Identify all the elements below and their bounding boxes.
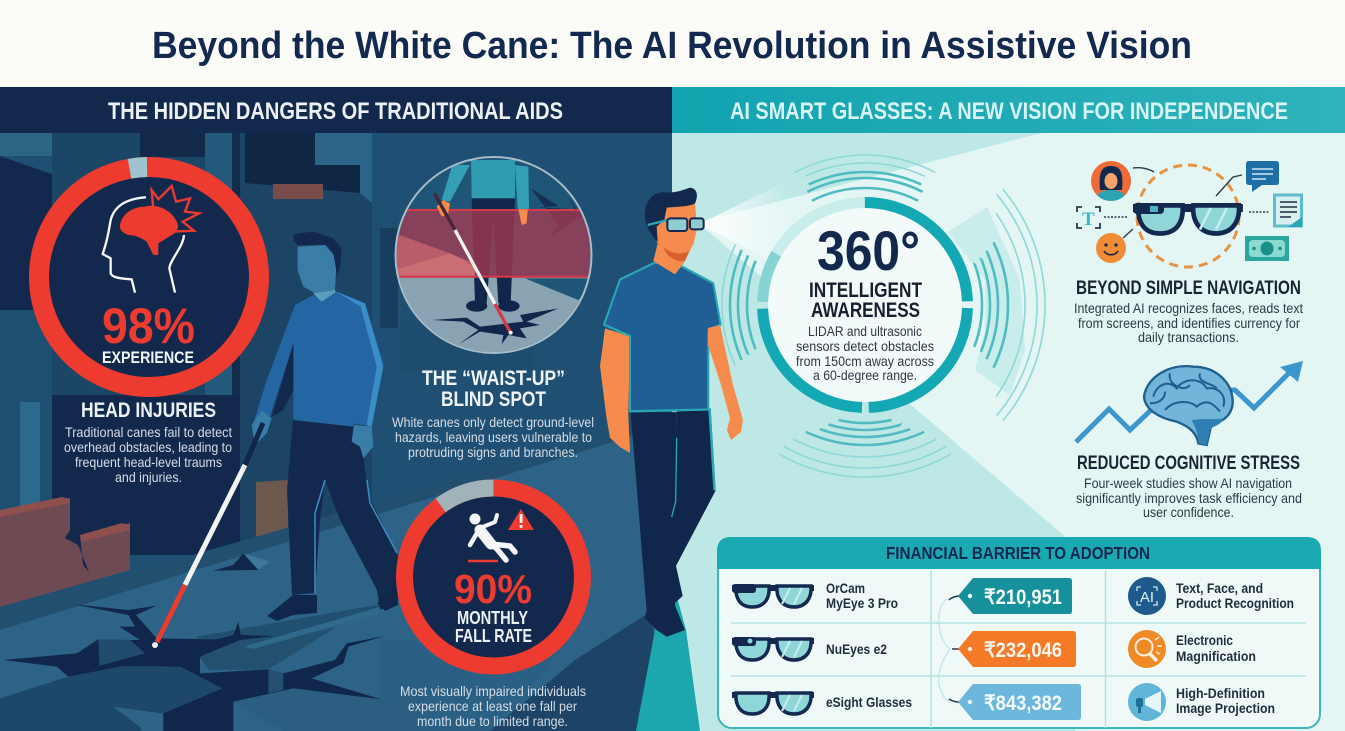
navigation text: from screens, and identifies currency for [1078, 315, 1300, 331]
fall rate text: experience at least one fall per [408, 698, 577, 714]
sonar arcs around the 360 ring [611, 51, 1119, 559]
heading: waist-up blind spot: THE “WAIST-UP” [422, 367, 565, 390]
cognitive stress text: Four-week studies show AI navigation [1084, 475, 1292, 491]
icon: document [1274, 195, 1302, 227]
icon: chat bubble [1246, 161, 1279, 192]
row: OrCam: OrCam [826, 581, 865, 596]
body [600, 262, 721, 637]
left panel background: dark street scene [0, 132, 672, 731]
feature: magnification: Electronic [1176, 633, 1233, 648]
head injuries text: frequent head-level traums [75, 454, 222, 470]
progress ring [759, 199, 971, 411]
right arm [708, 325, 743, 440]
feature: magnification [1128, 630, 1256, 668]
walking man with white cane [152, 232, 398, 648]
row: eSight: eSight Glasses [826, 695, 912, 710]
icon: text scan: T [1082, 209, 1095, 230]
table frame [718, 538, 1320, 728]
stat: 90% monthly fall rate [369, 453, 618, 701]
cognitive stress text [1076, 475, 1302, 520]
head injuries text: Traditional canes fail to detect [65, 424, 232, 440]
background branches [531, 188, 582, 236]
man: upper body and head [252, 232, 383, 458]
title: Beyond the White Cane: The AI Revolution in Assistive Vision [152, 25, 1192, 67]
row: OrCam [732, 581, 898, 611]
cognitive stress text: user confidence. [1143, 504, 1234, 520]
experience label: EXPERIENCE [102, 348, 194, 367]
feature: image projection: Image Projection [1176, 701, 1275, 716]
row: NuEyes: NuEyes e2 [826, 642, 887, 657]
brain [1144, 366, 1233, 445]
right panel background: light teal with scan beam [636, 132, 1345, 731]
left header: THE HIDDEN DANGERS OF TRADITIONAL AIDS [108, 98, 563, 125]
row: NuEyes [732, 637, 887, 660]
icon: banknote [1245, 236, 1289, 261]
heading: intelligent awareness: AWARENESS [811, 299, 920, 322]
awareness text: from 150cm away across [796, 353, 934, 369]
panel: 360 intelligent awareness [759, 199, 971, 411]
white cane [152, 423, 263, 648]
heading: intelligent awareness [809, 279, 922, 322]
icon: person falling [468, 514, 515, 561]
row: OrCam: MyEye 3 Pro [826, 596, 898, 611]
heading: head injuries: HEAD INJURIES [81, 399, 216, 422]
panel: financial barrier table [717, 537, 1321, 728]
left arm [600, 328, 630, 453]
feature: AI recognition: Product Recognition [1176, 596, 1294, 611]
smart glasses [1133, 204, 1243, 234]
section headers [0, 87, 1345, 133]
cracked pavement [0, 553, 420, 731]
awareness text: sensors detect obstacles [796, 338, 934, 354]
navigation text: daily transactions. [1138, 329, 1239, 345]
feature: AI recognition [1128, 577, 1294, 615]
man wearing AI smart glasses [600, 188, 743, 637]
connector lines [1104, 168, 1269, 238]
monthly fall rate label: FALL RATE [455, 626, 532, 646]
monthly fall rate label [455, 608, 532, 646]
dashed scan circle [1137, 165, 1239, 267]
icon: woman face [1091, 161, 1131, 201]
icon: brain with rising arrow [1076, 361, 1303, 445]
head injuries text [64, 424, 232, 485]
table dividers [731, 570, 1306, 728]
legs and shoes [466, 198, 520, 312]
head injuries text: and injuries. [115, 469, 182, 485]
donut chart 90% [369, 453, 618, 701]
price tag: eSight: ₹843,382 [984, 692, 1062, 715]
feature: AI recognition: Text, Face, and [1176, 581, 1263, 596]
price tag: eSight [958, 684, 1081, 720]
cognitive stress text: significantly improves task efficiency and [1076, 490, 1302, 506]
fall rate text [400, 683, 586, 729]
90% value: 90% [454, 566, 532, 612]
row: eSight [732, 692, 912, 714]
icon: head with brain injury [103, 186, 199, 293]
feature: AI recognition: AI [1140, 589, 1154, 606]
feature: magnification: Magnification [1176, 649, 1256, 664]
price tag: NuEyes: ₹232,046 [984, 639, 1062, 662]
rising arrow [1076, 361, 1303, 442]
icon: text scan [1077, 207, 1100, 230]
feature: image projection [1128, 683, 1275, 721]
98% value: 98% [102, 298, 195, 354]
head injuries text: overhead obstacles, leading to [64, 439, 232, 455]
head with glasses [645, 188, 704, 274]
trousers and shoes [631, 408, 716, 637]
title band [0, 0, 1345, 87]
heading: intelligent awareness: INTELLIGENT [809, 279, 922, 302]
awareness text [796, 323, 934, 383]
icon: warning triangle [508, 509, 534, 530]
fall rate text: Most visually impaired individuals [400, 683, 586, 699]
navigation text [1074, 300, 1303, 345]
price tag: NuEyes [958, 631, 1076, 667]
stat: 98% head injuries [22, 150, 276, 485]
icon: smiley [1096, 233, 1126, 263]
monthly fall rate label: MONTHLY [457, 608, 528, 628]
arms and shirt [442, 165, 470, 202]
fall rate text: month due to limited range. [417, 713, 568, 729]
heading: waist-up blind spot: BLIND SPOT [441, 388, 546, 411]
t-shirt [604, 262, 721, 411]
blind spot text [392, 414, 594, 460]
crack [432, 308, 558, 344]
waist-up blind spot illustration [395, 155, 595, 356]
red band [395, 209, 595, 278]
awareness text: LIDAR and ultrasonic [808, 323, 922, 339]
donut chart 98% [22, 150, 276, 404]
icon group: AI recognition around smart glasses [1077, 161, 1302, 267]
heading: financial barrier: FINANCIAL BARRIER TO ADOPTION [886, 543, 1150, 563]
cane [434, 193, 455, 230]
table header [717, 537, 1321, 569]
navigation text: Integrated AI recognizes faces, reads text [1074, 300, 1303, 316]
360 value: 360° [817, 219, 920, 282]
blind spot text: White canes only detect ground-level [392, 414, 594, 430]
price tag: OrCam: ₹210,951 [984, 586, 1062, 609]
camera module [1133, 203, 1164, 214]
blind spot text: hazards, leaving users vulnerable to [395, 429, 592, 445]
broken brick wall [0, 497, 130, 607]
man: legs [267, 420, 398, 621]
feature: image projection: High-Definition [1176, 686, 1265, 701]
blind spot text: protruding signs and branches. [408, 444, 578, 460]
price tag strings [939, 596, 971, 702]
price tag: OrCam [958, 578, 1072, 614]
awareness text: a 60-degree range. [813, 367, 917, 383]
heading: waist-up blind spot [422, 367, 565, 411]
hands [437, 200, 450, 217]
